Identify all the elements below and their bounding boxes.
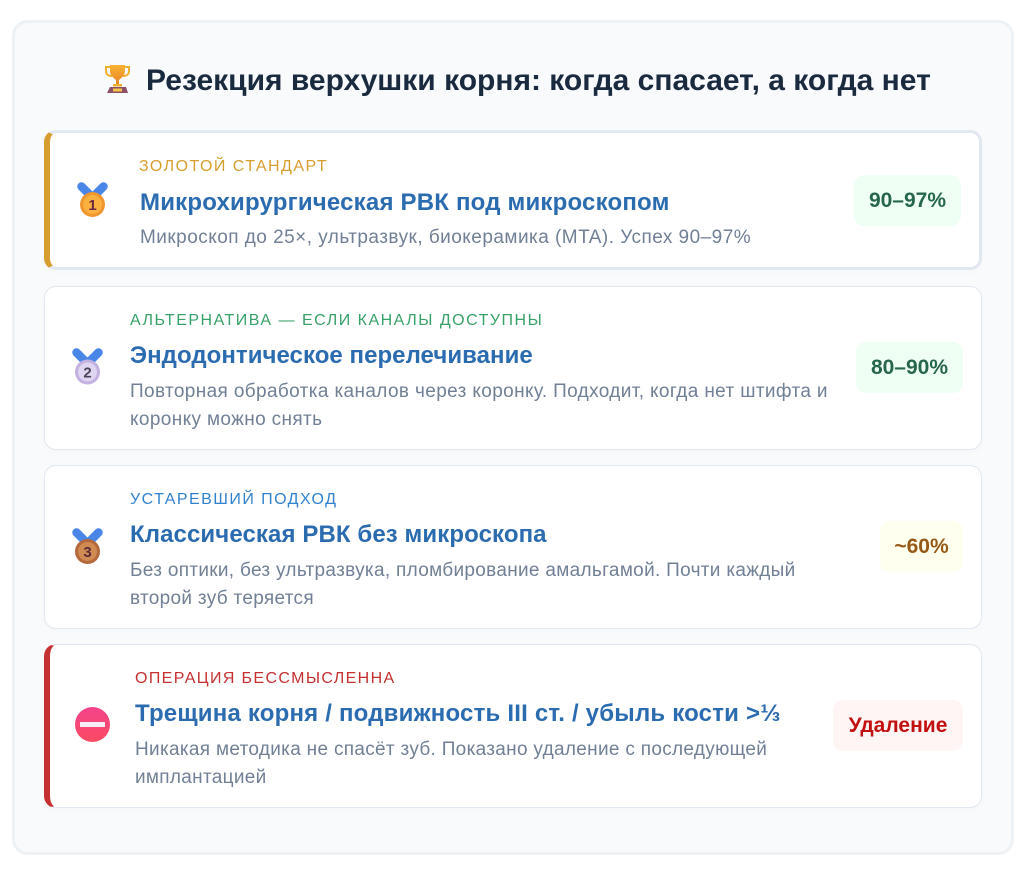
- badge: removal: [833, 700, 963, 751]
- icon: no entry: [75, 707, 110, 742]
- heading: card 1: Микрохирургическая РВК под микроскопом: [140, 189, 670, 216]
- icon: trophy: [105, 65, 130, 93]
- icon: silver medal: 2: [83, 364, 92, 382]
- heading: card 3: Классическая РВК без микроскопа: [130, 521, 547, 548]
- text: card 4 description: [135, 739, 767, 788]
- heading: card 4: Трещина корня / подвижность III ст. / убыль кости >⅓: [135, 700, 780, 727]
- icon: silver medal: [72, 348, 103, 384]
- panel: card 4 pointless: [44, 644, 982, 808]
- badge: ~60%: [880, 521, 963, 572]
- badge: 80–90%: [856, 342, 963, 393]
- icon: bronze medal: [72, 528, 103, 564]
- label: outdated approach: УСТАРЕВШИЙ ПОДХОД: [130, 491, 337, 508]
- panel: card 3 outdated: [44, 465, 982, 629]
- text: card 3 description: второй зуб теряется: [130, 588, 314, 609]
- panel: card 1 gold standard: [44, 130, 982, 270]
- icon: bronze medal: 3: [83, 544, 92, 561]
- icon: gold medal: [77, 182, 108, 217]
- panel: card 2 alternative: [44, 286, 982, 450]
- badge: removal: Удаление: [849, 714, 947, 737]
- text: card 2 description: Повторная обработка каналов через коронку. Подходит, когда нет штифта и: [130, 381, 828, 402]
- text: card 4 description: Никакая методика не спасёт зуб. Показано удаление с последующей: [135, 739, 767, 760]
- label: pointless operation: ОПЕРАЦИЯ БЕССМЫСЛЕННА: [135, 670, 396, 687]
- badge: 90–97%: [854, 175, 961, 226]
- badge: 90–97%: 90–97%: [869, 189, 946, 212]
- icon: gold medal: 1: [88, 197, 97, 214]
- text: card 2 description: коронку можно снять: [130, 409, 322, 430]
- title: Резекция верхушки корня: когда спасает, а когда нет: [146, 64, 931, 97]
- badge: 80–90%: 80–90%: [871, 356, 948, 379]
- badge: ~60%: ~60%: [894, 535, 949, 558]
- text: card 1 description: Микроскоп до 25×, ультразвук, биокерамика (MTA). Успех 90–97%: [140, 227, 751, 248]
- heading: card 2: Эндодонтическое перелечивание: [130, 342, 533, 369]
- text: card 2 description: [130, 381, 828, 430]
- text: card 4 description: имплантацией: [135, 767, 267, 788]
- text: card 3 description: Без оптики, без ультразвука, пломбирование амальгамой. Почти каждый: [130, 560, 796, 581]
- label: gold standard: ЗОЛОТОЙ СТАНДАРТ: [139, 158, 328, 175]
- text: card 3 description: [130, 560, 796, 609]
- label: alternative: АЛЬТЕРНАТИВА — ЕСЛИ КАНАЛЫ ДОСТУПНЫ: [130, 312, 543, 329]
